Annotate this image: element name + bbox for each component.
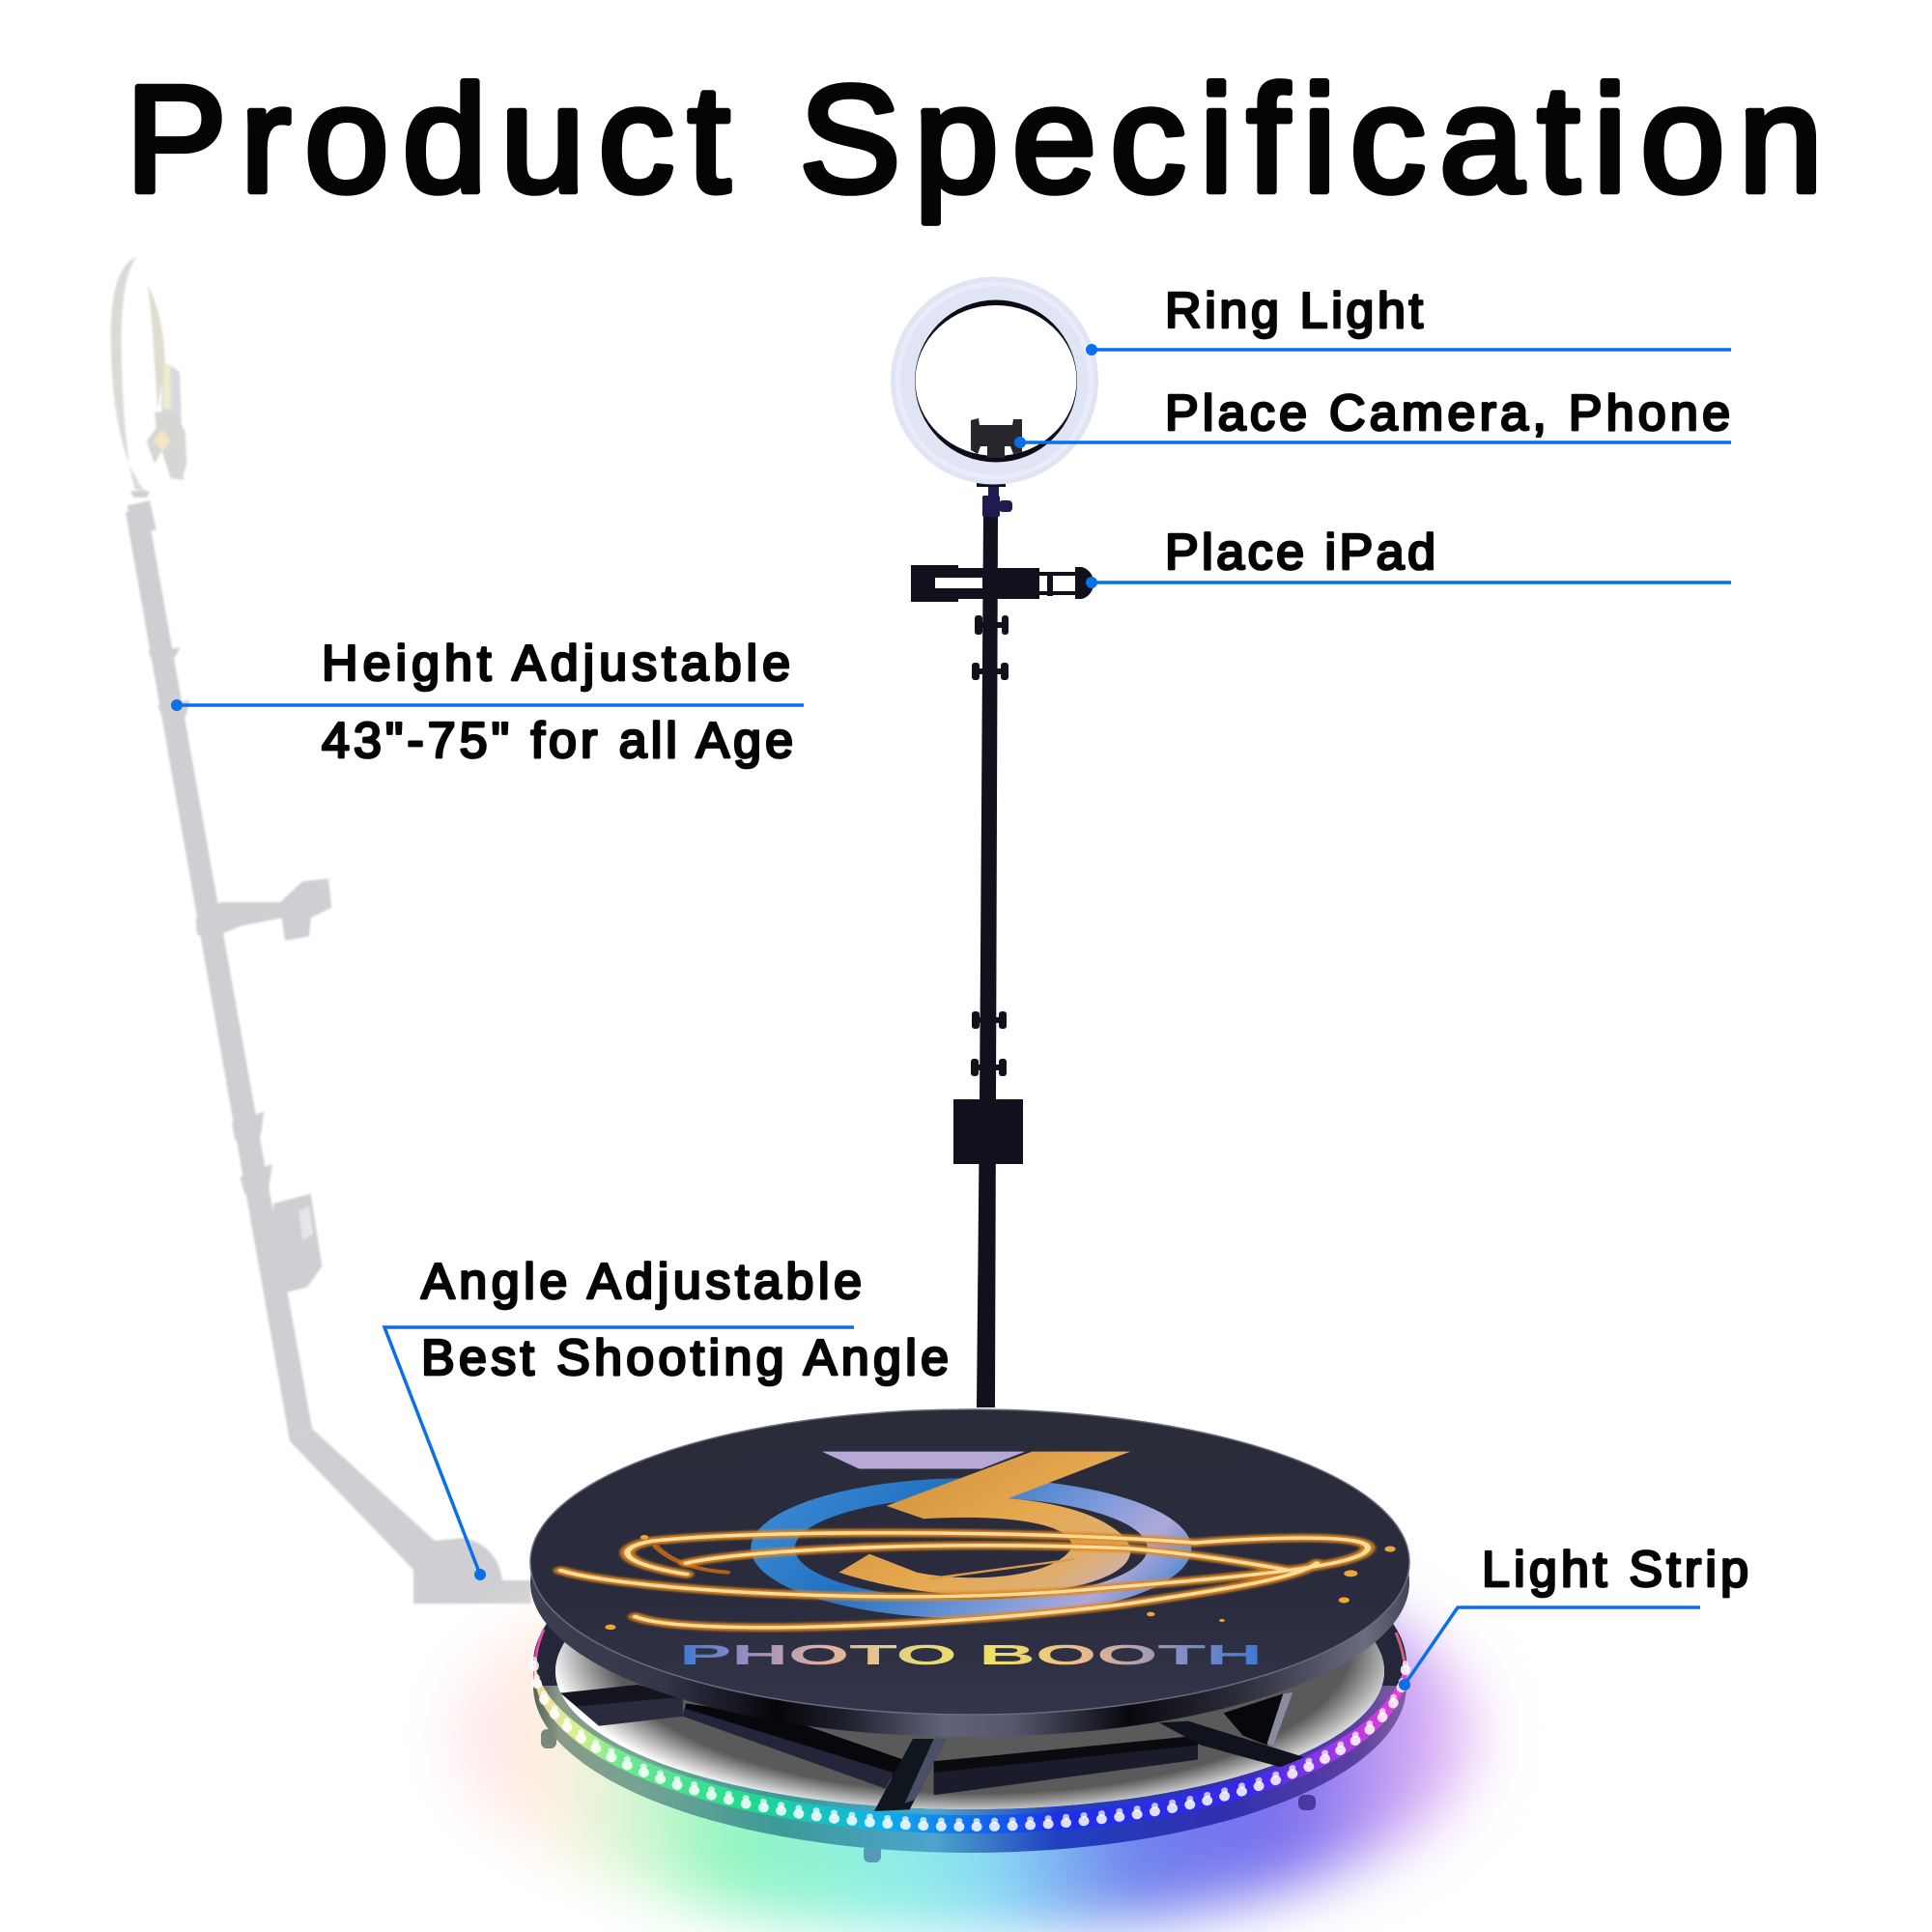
front of ring band xyxy=(533,1686,1406,1853)
ring body xyxy=(902,289,1086,472)
callout: iPad xyxy=(1086,525,1731,588)
callout: camera and phone: Place Camera, Phone xyxy=(1165,385,1730,441)
foot nubs xyxy=(541,1729,1316,1862)
callout: angle adjustable: Best Shooting Angle xyxy=(421,1330,949,1386)
callout: height adjustable: Height Adjustable xyxy=(322,636,790,692)
360 logo xyxy=(561,1452,1396,1630)
ghost pole xyxy=(126,507,312,1441)
logo sparks xyxy=(605,1535,1396,1630)
callout: light strip xyxy=(1399,1542,1748,1690)
callout: light strip: Light Strip xyxy=(1482,1542,1748,1598)
ball head xyxy=(977,482,1012,517)
platform rim xyxy=(530,1428,1409,1737)
pole xyxy=(977,512,998,1407)
light strip glow xyxy=(454,1536,1478,1932)
rotating platform base with light strip xyxy=(529,1624,1410,1862)
main stand xyxy=(911,482,1094,1407)
shadow under platform xyxy=(555,1642,1384,1809)
callout: ring light xyxy=(1086,283,1731,355)
callout: ring light: Ring Light xyxy=(1165,283,1424,339)
LED strip xyxy=(534,1630,1406,1833)
platform surface xyxy=(530,1409,1409,1715)
callout: height adjustable: 43"-75" for all Age xyxy=(322,713,793,769)
ghost stand: tilted position xyxy=(111,257,531,1604)
black inner ring xyxy=(915,299,1077,462)
round platform top xyxy=(530,1409,1409,1737)
ring light xyxy=(898,284,1092,477)
callout: height adjustable xyxy=(171,636,804,769)
logo ring xyxy=(751,1478,1191,1619)
callout: iPad: Place iPad xyxy=(1165,525,1435,581)
PHOTO BOOTH lettering: PHOTO BOOTH xyxy=(679,1640,1263,1671)
callout: angle adjustable: Angle Adjustable xyxy=(421,1254,862,1310)
control box xyxy=(953,1099,1023,1164)
ghost lower arm and base xyxy=(290,1429,531,1604)
logo top bar xyxy=(822,1452,1025,1469)
height clamps xyxy=(971,615,1009,1076)
left support struts xyxy=(560,1685,947,1811)
ghost ring light xyxy=(111,257,190,718)
ghost iPad holder xyxy=(196,879,331,1293)
right support struts xyxy=(934,1692,1307,1795)
ring opening xyxy=(555,1533,1384,1809)
logo light swirls xyxy=(561,1533,1368,1628)
iPad holder xyxy=(911,565,1094,602)
phone clamp xyxy=(971,418,1022,458)
logo numeral 3 xyxy=(838,1452,1130,1595)
back of ring band xyxy=(533,1502,1406,1825)
callout: angle adjustable xyxy=(384,1254,949,1580)
title: Product Specification xyxy=(126,55,1823,224)
